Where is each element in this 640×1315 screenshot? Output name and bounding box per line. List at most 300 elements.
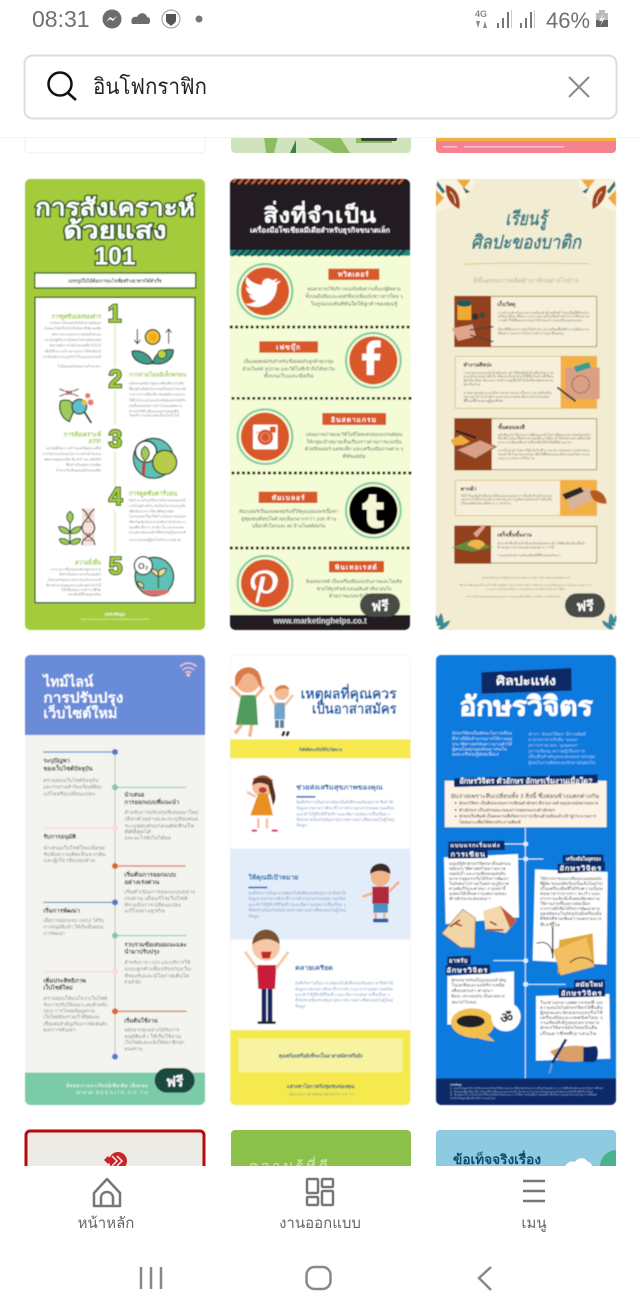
band: purpose section: [230, 849, 410, 939]
panel: what is calligraphy: อักษรวิจิตร ตัวอักษร อักษรเริ่มงานเมื่อใด?: [459, 774, 593, 785]
step: finish: ผ้าบาติกที่เสร็จแล้วมีเอกลักษณ์เฉพาะตัว ใช้ตัดเย็บเป็นเสื้อผ้า: [497, 539, 586, 545]
step 5 text: ความยั่งยืน: [75, 556, 101, 566]
section: pinterest: ช่วยให้ธุรกิจนำเสนอสินค้าที่น่าสนใจ: [316, 585, 392, 592]
panel: modern tools: ใช้งานง่ายขึ้นอย่างต่อเนื่อง: [540, 899, 590, 906]
step: gather materials: เลือกสีที่ต้องการ ผสมให้เข้ากัน และเตรียมพื้นที่ทำงานให้สะอาด: [497, 327, 589, 332]
step: start design: อย่างเร่งด่วน: [124, 879, 159, 886]
step: get approval: รับการอนุมัติ: [43, 834, 76, 841]
step 4 text: การดูดซับคาร์บอน: [129, 489, 178, 498]
step 2 text: ระหว่างการเคลื่อนที่จะปล่อยพลังงานออกมา: [129, 392, 186, 397]
section: tumblr: สู่ชุมชนที่สนใจด้วยบล็อกมากกว่า 200 ล้าน: [241, 514, 337, 522]
panel: modern calligraphy: [536, 979, 610, 1061]
step 3 text: ATP: [88, 439, 102, 446]
step: site performance: เว็บไซต์ต้องรวดเร็วที่สุดและ: [43, 1013, 101, 1021]
illustration: boy waving: [362, 863, 399, 922]
step: design: ตามเส้นลายอย่างตั้งใจ เทียนจะป้องกันไม่ให้สีซึมในส่วนที่เขียน: [463, 374, 554, 379]
heading: [250, 201, 390, 235]
panel: modern calligraphy: อักษรวิจิตร: [561, 989, 602, 997]
footer: ติดต่อเราและเรียนรู้เพิ่มเติม เยี่ยมชม: [66, 1082, 148, 1089]
step: get approval: และผู้เกี่ยวข้องทุกฝ่าย: [43, 857, 95, 864]
section: instagram: ที่ทันสมัย: [342, 453, 366, 459]
panel: origins: บนผนังถ้ำ และงานเขียนบนแผ่นดิน: [449, 869, 506, 876]
icon: facebook: [346, 333, 401, 388]
heading: เครื่องมือโซเชียลมีเดียสำหรับธุรกิจขนาดเล็ก: [250, 225, 390, 235]
heading: [301, 684, 397, 717]
step: identify problems: ตรวจสอบเว็บไซต์ปัจจุบัน: [43, 776, 99, 784]
step 2 text: สำหรับใช้ในขั้นตอนต่อไปของพืช: [129, 408, 180, 413]
intro paragraphs: ผู้สนใจงานศิลปะคงรักษามันต่อไป: [528, 760, 596, 766]
panel: arabic calligraphy: ศิลปะ ประกอบกัน เป็นลวดลาย: [451, 992, 505, 998]
intro paragraphs: ที่ช่างฝีมือจำนวนมากใช้งานอยู่: [452, 736, 512, 742]
credits: ศึกษาเพิ่มเติมเรื่องประวัติ เทคนิค และลวดลายผ้าบาติกจากแหล่งข้อมูลทางวัฒนธรรมต่าง ๆ: [459, 583, 592, 588]
yellow footer: [230, 1030, 410, 1105]
heading: เรียนรู้: [505, 208, 550, 231]
battery icon: [596, 10, 608, 27]
partial card: top right pink: [436, 120, 616, 153]
panel: modern tools: [533, 854, 608, 965]
panel: origins: เผาจากยุคแรกเริ่มได้รับการพัฒนา: [449, 876, 509, 882]
panel: arabic calligraphy: อาหรับ: [449, 958, 468, 965]
section: relax: ทั้งยังช่วยป้องกันปัญหาสุขภาพบางอย่างที่พบบ่อยในผู้ใหญ่: [295, 996, 394, 1004]
step: dry: ตากผ้า: [461, 485, 476, 493]
heading: ศิลปะของบาติก: [471, 231, 583, 252]
section: tumblr: ทัมเบลอร์: [272, 494, 306, 502]
step: propose design: เลือกตัวอย่างและระบุข้อเสนอ: [124, 816, 199, 823]
band: purpose section: ข้อมูลจากหลายการศึกษาชี้ว่าการทำงานอาสาช่วยลดความเครียด: [248, 894, 346, 902]
step: development: เริ่มการพัฒนา: [43, 907, 80, 915]
partial card: top middle leaves: [231, 120, 411, 153]
step: site performance: [43, 977, 107, 1032]
section: relax: และทำให้รู้สึกมีชีวิตชีวาและมีความสุขมากขึ้นเรื่อย ๆ: [295, 990, 390, 998]
footer: [81, 611, 150, 621]
step 5 text: ให้เอื้อต่อการดำรงชีวิต: [61, 587, 101, 592]
section: relax: คลายเครียด: [295, 964, 333, 972]
step: gather feedback: [124, 941, 191, 984]
section: relax: ข้อมูลจากหลายการศึกษาชี้ว่าการทำงานอาสาช่วยลดความเครียด: [295, 984, 393, 992]
intro paragraphs: (การเขียน) ความรู้เรื่องการ: [528, 748, 586, 754]
timeline: [43, 749, 186, 1060]
icon: pinterest: [238, 556, 292, 611]
step: launch: เว็บไซต์และแจ้งให้สมาชิกทุก: [124, 1038, 185, 1046]
panel: origins: แสดงให้เห็นความงดงามของ: [449, 890, 506, 896]
step: site performance: ผลการค้นหา: [43, 1027, 76, 1032]
header: [25, 655, 205, 735]
step 1 text: ด้วยคลอโรฟิลล์ในใบไม้ ซึ่งเป็นสารสีเขียวของพืช: [44, 325, 102, 331]
step: dye: หลังเทียนแห้ง ใช้แปรงระบายสีย้อมลงบนผ้าในส่วนที่ต้องการอย่างค่อยเป็นค่อยไป: [498, 431, 591, 437]
search field: [24, 56, 616, 118]
band: purpose section: ให้คุณมีเป้าหมาย: [248, 872, 299, 881]
step: start design: แก้ไขทางธุรกิจ: [124, 908, 165, 915]
section: facebook: เป็นแพลตฟอร์มสำหรับเชื่อมต่อกับลูกค้าทุกกลุ่ม: [244, 357, 334, 365]
step numbers: 3: [108, 427, 122, 454]
bottom navigation: [0, 1166, 640, 1315]
step: dry: และตากในที่ร่มจนแห้ง ลวดลายจะปรากฏชัดเจนพร้อมนำไปตัดเย็บ: [461, 496, 552, 502]
section: health: ทั้งยังช่วยป้องกันปัญหาสุขภาพบางอย่างที่พบบ่อยในผู้ใหญ่: [296, 815, 395, 823]
infographic card: batik: [435, 179, 616, 630]
intro paragraphs: (ความงาม) และ "graphein": [528, 743, 579, 748]
infographic card: volunteer reasons: [230, 655, 410, 1105]
step: start design: ที่รวมถึงการเปลี่ยนแปลง: [124, 902, 181, 908]
step: finish: ร่วมอนุรักษ์งานหัตถศิลป์ที่สืบทอดกันมา: [497, 552, 561, 558]
intro paragraphs: คำว่า "อักษรวิจิตร" มีรากศัพท์: [528, 732, 586, 737]
yellow footer: แสวงหาโอกาสกับชุมชนของคุณ: [287, 1083, 355, 1090]
section: health: ข้อมูลจากหลายการศึกษาชี้ว่าการทำงานอาสาช่วยลดความเครียด: [296, 803, 394, 811]
dotted dividers: [230, 327, 412, 548]
step: gather materials: วางผ้าให้ตึงบนกรอบไม้ก่อนการลงมือออกแบบ: [497, 318, 582, 323]
step: identify problems: [43, 757, 102, 796]
step 5 text: ซึ่งจำเป็นต่อการหายใจของสัตว์: [59, 571, 101, 577]
step: finish: ผ้าคลุม และของตกแต่งต่าง ๆ ได้: [497, 545, 554, 550]
credits: รวบรวมโดยทีมงานออกแบบอินโฟกราฟิก: [486, 587, 566, 591]
panel: arabic calligraphy: เพื่อบอกเล่า ศาสนา: [451, 988, 493, 993]
section: instagram: [305, 413, 404, 459]
section: relax: [295, 964, 394, 1009]
dark header: [230, 179, 410, 256]
step: dye: ก่อนทำซ้ำในลวดลายใหม่ เพื่อให้สีติดทนและมีความสดใสยาวนาน: [498, 452, 590, 457]
section: twitter: ในรูปแบบทันทีทันใดให้ลูกค้าของคุณรู้: [311, 301, 398, 308]
step: gather feedback: แบบลูกค้าเพื่อปรับปรุงเว็บ: [124, 965, 191, 973]
step: site performance: SEO การโหลดข้อมูลรวม: [43, 1008, 95, 1015]
step: gather materials: เพื่อความสะดวกในการทำงานทุกขั้นตอน: [497, 331, 565, 337]
step 1 text: [43, 312, 102, 369]
top app bar: [0, 0, 640, 138]
step numbers: [108, 301, 123, 580]
step 1 text: จากนั้นพลังงานจะถูกเก็บไว้ในรูปแบบสารเคมี: [43, 353, 101, 359]
section: facebook: เฟซบุ๊ก: [276, 344, 301, 352]
yellow footer: เยี่ยมชมเราที่ WWW.BEESITE.CO.TH: [289, 1091, 354, 1096]
panel: what is calligraphy: [445, 774, 607, 827]
footer with URL: [230, 615, 410, 630]
step numbers: 1: [108, 301, 122, 328]
step: propose design: และอะไรยังไม่ได้ผล: [124, 834, 171, 840]
badge: free: ฟรี: [371, 598, 389, 614]
step 1 text: พลังงานจากแสงจะกระตุ้นอิเล็กตรอน: [52, 330, 102, 337]
badge: free: ฟรี: [166, 1073, 184, 1089]
network indicator: 4G: [475, 9, 487, 19]
step: identify problems: และรวบรวมคำร้องเรียนที่ต้อง: [43, 784, 102, 790]
panel: modern tools: ยิ่งขึ้น: [539, 920, 561, 927]
step: gather materials: เก็บวัสดุ: [497, 300, 516, 308]
illustration: girl in orange dress: [247, 775, 278, 831]
infographic card: calligraphy: [436, 655, 616, 1105]
band: purpose section: ทั้งยังช่วยป้องกันปัญหาสุขภาพบางอย่างที่พบบ่อยในผู้ใหญ่: [248, 906, 346, 914]
step: gather feedback: นำมาปรับปรุง: [124, 947, 160, 955]
step: development: [43, 907, 104, 936]
illustration: happy man: [245, 930, 288, 1023]
yellow footer: คุณพร้อมหรือยังที่จะเป็นอาสาสมัครหรือยัง: [279, 1051, 363, 1059]
step: gather feedback: ที่รองรับและมีโอกาสเติบโต: [124, 972, 189, 978]
badge: free: [360, 593, 400, 617]
partial card: red border: [26, 1131, 204, 1191]
step 3 text: เอนไซม์ที่เรียกว่า ATP ไซเทสใช้พลังงานที่ได้: [46, 446, 101, 451]
panel: origins: สมัยประวัติศาสตร์โดยวาดภาพ: [449, 866, 506, 871]
badge: free: [155, 1068, 195, 1093]
step: development: การพัฒนา: [43, 931, 65, 936]
band: purpose section: อันที่จริงการเป็นอาสาสมัครเป็นสิ่งที่ช่วยเสริมสุขภาพ ซึ่งทำให้: [248, 889, 346, 896]
icon: search: [48, 72, 76, 100]
step 1 text: เพื่อใช้ในการสร้างสารอาหารให้กับต้นไม้: [44, 348, 101, 353]
panel: origins: [444, 841, 519, 924]
panel: what is calligraphy: ตัวอักษร เป็นลักษณะของการออกแบบตัวอักษร: [459, 806, 556, 812]
step: propose design: ระบุจุดเด่นก่อนตัดสินใจ: [124, 822, 195, 829]
section: tumblr: [239, 492, 339, 529]
infographic card: website timeline: [25, 655, 205, 1105]
section: facebook: ทั้งบนเว็บและมือถือ: [264, 372, 314, 379]
step: gather materials: [452, 296, 597, 347]
footer: https://www.example.co.th/infographic-photosynthesis: [81, 617, 150, 621]
android back button: [479, 1267, 491, 1290]
step: dye: ขั้นตอนลงสี: [498, 422, 525, 431]
header: เว็บไซต์ใหม่: [43, 704, 117, 721]
icon: leaf with DNA and magnifier: [59, 389, 94, 423]
footer: WWW.BEESITE.CO.TH: [76, 1090, 149, 1095]
nav item: home: [78, 1179, 134, 1232]
step: dry: เป็นผลิตภัณฑ์ต่าง ๆ ต่อไป: [461, 499, 511, 506]
step 4 text: และถ่ายทอดสู่ผู้บริโภคในระบบนิเวศ: [129, 537, 182, 542]
step: start design: เริ่มต้นการออกแบบ: [124, 871, 176, 879]
section: instagram: ให้กลุ่มเป้าหมายเห็นเรื่องราวผ่านการแบ่งปัน: [306, 437, 402, 445]
section: health: อันที่จริงการเป็นอาสาสมัครเป็นสิ่งที่ช่วยเสริมสุขภาพ ซึ่งทำให้: [296, 799, 393, 806]
icon: oxygen and plants: [134, 557, 174, 596]
header: การปรับปรุง: [43, 690, 124, 707]
heading: ศิลปะแห่ง: [496, 674, 556, 688]
step 2 text: [129, 369, 186, 418]
step 2 text: การถ่ายโอนอิเล็กตรอน: [129, 369, 186, 378]
step: dye: สีจะซึมไปบนเนื้อผ้าและหยุดที่แนวเทียน ทำให้เกิดลวดลายที่คมชัด: [498, 436, 591, 442]
section: tumblr: ทัมเบลอร์เป็นแพลตฟอร์มที่ให้คุณเผยแพร่เนื้อหา: [239, 507, 339, 515]
step: propose design: นำเสนอ: [124, 792, 145, 799]
icon: twitter: [238, 264, 292, 319]
panel: modern tools: เป็นเครื่องมือที่ได้รับความนิยม: [540, 885, 603, 891]
subtitle: มีขั้นตอนการผลิตผ้าบาติกอย่างไรบ้าง: [473, 275, 578, 285]
yellow band: รับสิทธิพระเสริมให้กับเวียดนาม: [299, 746, 342, 752]
credits: ขอบคุณข้อมูลจากผู้เชี่ยวชาญงานหัตถกรรมผ้าบาติก www.example.co.th: [481, 575, 570, 580]
step: dye: [451, 418, 597, 470]
nav item: menu: [521, 1181, 547, 1232]
android recents button: [141, 1267, 161, 1289]
subtitle box: [35, 273, 196, 288]
footer: 2. ข้อมูลเพิ่มเติมเกี่ยวกับเครื่องมือและรูปแบบตัวอักษรจากแหล่งข้อมูลออนไลน์และหนังสือที่เกี่ยวข้อง: [450, 1089, 593, 1093]
step: dye: เหมาะแก่การใช้งาน: [498, 457, 536, 461]
section: twitter: [305, 269, 403, 308]
section: twitter: คุณสามารถใช้บริการแบ่งปันข้อความสั้นแก่ผู้ติดตาม: [307, 286, 401, 293]
step 5 text: ที่ช่วยรักษาสมดุลของระบบนิเวศบนโลกใบนี้: [46, 582, 102, 588]
step: get approval: รับฟังความคิดเห็นจากทีม: [43, 850, 106, 857]
icon: oxygen and plants: O₂: [138, 561, 149, 571]
step: launch: [124, 1017, 185, 1052]
badge: free: ฟรี: [576, 598, 594, 614]
heading: เป็นอาสาสมัคร: [312, 700, 397, 717]
section: pinterest: พินเทอเรสต์ เป็นเครื่องมือแบ่งปันภาพและไอเดีย: [306, 577, 402, 584]
step: design: ร่างลวดลายลงบนผ้าด้วยดินสอ แล้วใช้จันติ้งตักน้ำเทียนร้อนวาด: [463, 370, 553, 375]
panel: origins: การเขียน: [451, 851, 486, 859]
section: twitter: ทั้งบนมือถือและเดสก์ท็อปเพื่อแจ้งข่าวสารใหม่ ๆ: [305, 292, 403, 300]
icon: tumblr: [346, 483, 401, 538]
icon: instagram: [238, 409, 292, 464]
divider: [463, 263, 589, 264]
panel: modern tools: ปากกาเมจิกมีเส้นคมชัดงดงาม: [540, 896, 600, 901]
step 3 text: ซึ่งจำเป็นต่อการผลิต: [66, 461, 101, 467]
step 3 text: [43, 431, 102, 472]
step: start design: เริ่มดำเนินการออกแบบอย่าง: [124, 888, 195, 894]
section: twitter: ทวิตเตอร์: [338, 271, 369, 279]
nav item: menu: เมนู: [521, 1215, 547, 1232]
intro paragraphs: และเรียนรู้ต่อเนื่อง: [452, 752, 499, 758]
step 1 text: ในขั้นตอนต่อไปของการสร้างอาหาร: [58, 364, 101, 369]
step: dye: จากนั้นนำผ้าไปตากให้แห้งในที่ร่ม และตรวจสอบความสม่ำเสมอ: [498, 448, 590, 453]
partial card: blue fact: ข้อเท็จจริงเรื่อง: [453, 1150, 541, 1167]
corner ornaments: [435, 180, 616, 630]
panel: modern tools: ดิจิทัลที่ช่วยเพิ่มความงดงามมาก: [540, 916, 602, 921]
step: development: การอนุมัติแล้ว ให้เริ่มขั้นตอน: [43, 924, 104, 931]
illustration: folders and pens: [537, 926, 594, 975]
section: relax: อันที่จริงการเป็นอาสาสมัครเป็นสิ่งที่ช่วยเสริมสุขภาพ ซึ่งทำให้: [295, 980, 393, 987]
step 1 text: การสังเคราะห์ด้วยแสงเริ่มต้นด้วยการดูดซับแสง: [49, 320, 101, 325]
status icon: shield: [162, 10, 180, 28]
illustration: mother and child: [231, 667, 293, 737]
header: ไทม์ไลน์: [41, 673, 94, 690]
section: relax: ข้อมูล: [295, 1003, 306, 1009]
panel: arabic calligraphy: [446, 956, 514, 1025]
step 2 text: ใช้ปั๊มไฮโดรเจนไอออนข้ามเยื่อหุ้มเซลล์ NADPH: [129, 397, 186, 403]
step: propose design: การออกแบบที่แนะนำ: [124, 798, 179, 806]
step 3 text: น้ำตาลในขั้นตอนถัดไปของพืช: [56, 467, 102, 472]
step 4 text: ภายในวัฏจักรคัลวิน เกิดเป็นน้ำตาลโมเลกุลเล็ก: [129, 502, 186, 509]
footer: แหล่งข้อมูล: [105, 611, 125, 617]
panel: what is calligraphy: อักษรวิจิตร เป็นศิลปะของการเขียนตัวอักษร ที่สวยงามด้วยอุปกรณ์หลากหลาย: [459, 799, 598, 806]
panel: modern tools: ที่ผู้จัด ขนนกตัดเรียงเป็นเส้นในยุโรป: [540, 880, 603, 887]
panel: modern calligraphy: เครื่องมือและเทคนิคใหม่ ๆ: [540, 1015, 603, 1020]
panel: origins: ตามคัมภีร์และศาสนา งานเหล่านี้: [449, 884, 507, 891]
step: finish: เสร็จสิ้นขั้นงาน: [497, 529, 532, 538]
step: launch: คนทราบ: [124, 1047, 143, 1052]
step 3 text: พลังงานสูงสองชนิด คือ ATP และ NADPH: [44, 457, 102, 462]
section: pinterest: พินเทอเรสต์: [335, 563, 378, 571]
footer: เข้าถึงข้อมูลเพิ่มเติมได้ทางออนไลน์: [450, 1096, 496, 1100]
step numbers: 2: [108, 367, 122, 394]
step: design: [455, 356, 600, 408]
step: launch: หลังจากทุกอย่างได้รับการ: [124, 1026, 180, 1033]
step: launch: เริ่มต้นใช้งาน: [124, 1017, 158, 1025]
step: identify problems: ของเว็บไซต์ปัจจุบัน: [43, 764, 93, 773]
section: health: [296, 783, 395, 829]
credits: [459, 575, 592, 600]
panel: origins: มนุษย์รู้จักอักษรวิจิตรมาตั้งแต่ก่อน: [449, 859, 511, 867]
nav item: designs: [279, 1179, 361, 1232]
step: get approval: นำเสนอเว็บไซต์ใหม่เพื่อขอ: [43, 843, 105, 850]
panel: modern tools: ต่อมาจากปากกา ตะกั่ว และ: [540, 891, 601, 896]
panel: arabic calligraphy: อักษรวิจิตร: [446, 967, 488, 975]
panel: origins: ตัวอักษรเสมอมา: [449, 896, 491, 901]
step: dye: สามารถซ้อนสีหลายชั้นเพื่อให้ได้มิติที่สวยงาม: [498, 439, 571, 444]
footer: 1. แหล่งข้อมูลเกี่ยวกับศิลปะแห่งอักษรวิจิตรและประวัติศาสตร์ของการเขียนในยุคต่าง ๆ จากพิพิธภัณฑ์และสถาบันการศึกษา: [450, 1086, 604, 1091]
partial card: top left: [25, 120, 205, 153]
battery percent: 46%: [546, 8, 590, 33]
section: health: และทำให้รู้สึกมีชีวิตชีวาและมีความสุขมากขึ้นเรื่อย ๆ: [296, 809, 390, 817]
step: start design: [124, 871, 195, 915]
panel: modern tools: เครื่องมือในยุคของ: [566, 855, 601, 862]
panel: modern tools: อักษรวิจิตร: [559, 865, 602, 873]
footer: แหล่งข้อมูล: [450, 1083, 462, 1088]
step 2 text: ที่ฝังอยู่ในเยื่อหุ้มไทลาคอยด์ในคลอโรพลาสต์: [129, 386, 186, 392]
panel: modern calligraphy: ความสนใจในอักษรวิจิตรได้ฟื้นคืน: [540, 1003, 603, 1010]
nav item: home: หน้าหลัก: [78, 1215, 134, 1232]
search query text: อินโฟกราฟิก: [93, 74, 207, 99]
step: site performance: ตรวจสอบให้แน่ใจว่าเว็บไซต์: [43, 994, 107, 1001]
step 4 text: [129, 489, 186, 542]
connector lines: [493, 823, 566, 1078]
step 1 text: ส่งผ่านพลังงานไปยังโมเลกุลอื่นในใบไม้: [49, 343, 101, 349]
partial card: green: [231, 1130, 411, 1190]
heading: เหตุผลที่คุณควร: [301, 684, 397, 703]
step 5 text: กระบวนการนี้ปล่อยออกซิเจนสู่บรรยากาศ: [51, 566, 102, 571]
credits: ดาวน์โหลดเทมเพลตและรายละเอียดอื่น ๆ ได้ทางเว็บไซต์: [467, 594, 560, 600]
panel: modern calligraphy: ผู้สอนและนักออกแบบเริ่มใช้: [540, 1010, 603, 1016]
icon: wifi: [180, 663, 197, 676]
step numbers: 4: [109, 484, 123, 511]
heading: photosynthesis title: 101: [94, 243, 136, 270]
step: design: พื้นที่ของผู้ผลิต: [463, 398, 503, 403]
nav item: designs: งานออกแบบ: [279, 1215, 361, 1232]
band: purpose section: ข้อมูล: [248, 913, 260, 919]
step: site performance: รับการปรับให้เหมาะสมสำหรับ: [43, 1002, 107, 1008]
step: development: เมื่อการออกแบบ UX/UI ได้รับ: [43, 917, 104, 923]
section: tumblr: บล็อกทั่วโลกและ 80 ล้านโพสต์ต่อวัน: [252, 522, 326, 529]
step: gather feedback: สำหรับการ I GO และบริการใช้: [124, 959, 190, 965]
section: health: ช่วยส่งเสริมสุขภาพของคุณ: [296, 783, 383, 791]
step: gather materials: การทำบาติกเริ่มจากการเตรียมผ้าฝ้ายหรือผ้าไหมเนื้อดีที่ซักแล้ว: [497, 310, 589, 315]
step: dry: [455, 480, 607, 516]
icon: plant and DNA: [59, 508, 95, 546]
band: purpose section: และทำให้รู้สึกมีชีวิตชีวาและมีความสุขมากขึ้นเรื่อย ๆ: [248, 900, 346, 908]
infographic card: photosynthesis: [25, 179, 205, 630]
footer: [25, 1073, 205, 1105]
step 3 text: การสังเคราะห์: [64, 431, 102, 439]
panel: modern tools: ยุคสมัยจนในปัจจุบันมีเครื่องมือ: [540, 911, 602, 917]
icon: clear: [569, 77, 589, 97]
step: gather materials: เตรียมเทียน สีย้อม แปรง และเครื่องมือสำหรับการเขียนลาย: [497, 314, 589, 319]
heading: อักษรวิจิตร: [459, 691, 593, 721]
footer: [436, 1078, 616, 1105]
step: gather feedback: รวบรวมข้อเสนอแนะและ: [124, 941, 187, 949]
step: design: เช่น ดอกไม้ ใบไม้ สัตว์ และลายเรขาคณิต ซึ่งต่างกันไปในแต่ละ: [463, 394, 550, 399]
step 3 text: จากไฮโดรเจนไอออนในการรวมตัวเป็นโมเลกุล: [43, 450, 101, 457]
step: design: ลวดลายแต่ละแบบมีความหมายและเรื่องราวจากท้องถิ่น: [463, 390, 552, 395]
step: propose design: สำหรับการปรับปรุงที่เสนอมาใหม่: [124, 809, 198, 816]
step numbers: 5: [109, 553, 123, 580]
icon: leaf cell circle: [133, 438, 177, 478]
partial card: green: ความรู้ที่ดี: [249, 1156, 331, 1175]
section: pinterest: ด้วยภาพแบบเข้าใจง่าย: [329, 593, 379, 599]
step: design: ผู้ทำต้องมีสมาธิและความชำนาญเพื่อให้ได้เส้นที่คมชัดสวยงาม: [463, 378, 553, 383]
step: site performance: เชื่อมต่อสำคัญเรื่องการจัดอันดับ: [43, 1020, 107, 1027]
step 4 text: โมเลกุลเหล่านี้ถูกใช้สร้างแป้งและเซลลูโลส: [129, 514, 186, 520]
subtitle box: เบรกรูปใบไม้ต้องการอะไรเพื่อสร้างอาหารได้สำเร็จ: [68, 276, 162, 284]
status icon: messenger: [102, 10, 122, 28]
panel: what is calligraphy: นับง่ายเพราะสืบเปลี่ยนทั้ง 3 สิ่งนี้ ซึ่งค่อนข้างแตกต่างกัน: [451, 792, 599, 800]
intro paragraphs: อักษรวิจิตรเป็นทักษะในการเขียน: [452, 729, 512, 735]
android home button: [306, 1267, 330, 1289]
step 4 text: NADP และ ATP ถูกใช้ในการตรึงคาร์บอนไดออกไซด์: [129, 499, 186, 503]
heading: photosynthesis title: ด้วยแสง: [63, 217, 167, 244]
intro paragraphs: [452, 729, 596, 766]
step 1 text: การดูดซับแสงของสาร: [52, 312, 101, 321]
step: dry: ใช้น้ำร้อนต้มผ้าเพื่อลอกเทียนออกจนหมด จากนั้นซักด้วยน้ำสะอาด: [461, 493, 552, 498]
panel: origins: แบบแรกเริ่มแห่ง: [450, 841, 500, 849]
intro paragraphs: มาจากภาษากรีกคือ "kallos": [528, 737, 579, 742]
yellow band: [230, 739, 410, 758]
step 2 text: อิเล็กตรอนพลังงานสูงจะเคลื่อนที่ผ่านโปรตีน: [129, 379, 185, 385]
